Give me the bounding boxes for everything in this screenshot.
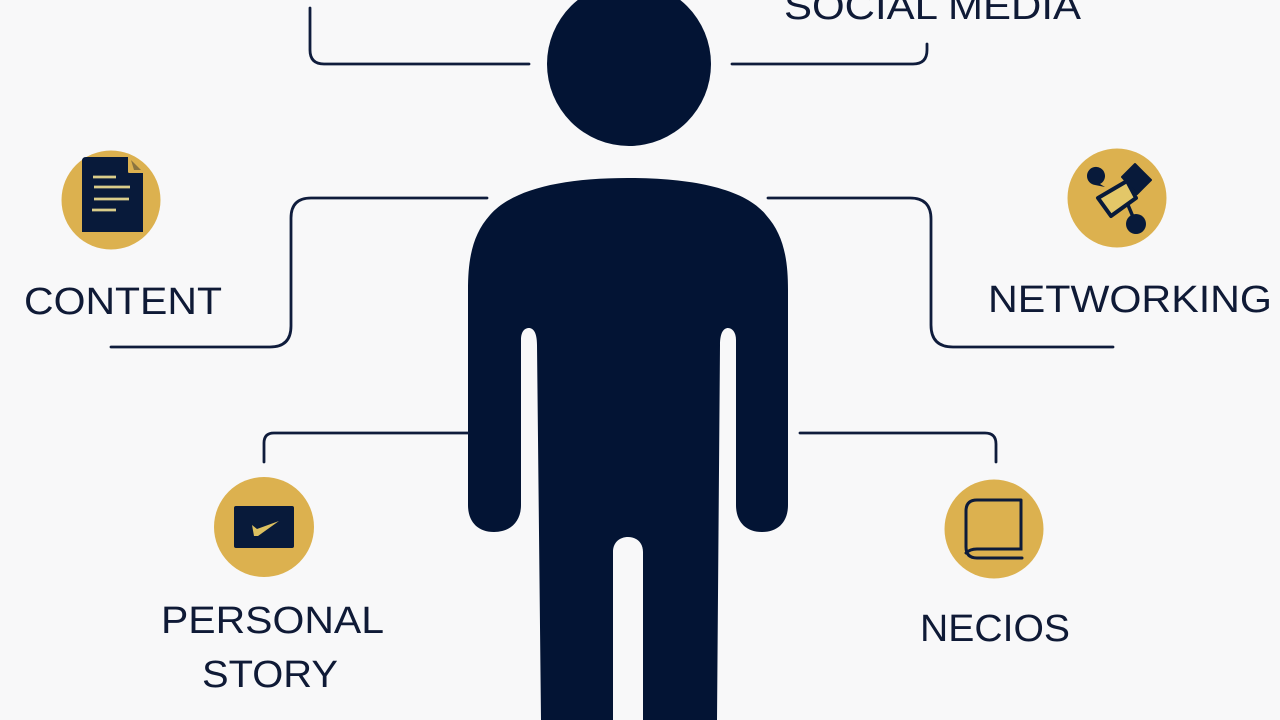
connector: content (111, 198, 487, 347)
label: networking: NETWORKING (988, 279, 1272, 321)
panel: book topic (920, 480, 1070, 650)
connector: personal story (264, 433, 468, 462)
icon: document (62, 150, 160, 250)
label: content: CONTENT (24, 281, 222, 323)
icon: check card (214, 477, 314, 577)
label: personal story: PERSONAL (161, 600, 384, 642)
panel: networking (988, 148, 1272, 321)
connector lines (111, 8, 1113, 462)
figure head (547, 0, 711, 146)
connector: lower right (800, 433, 996, 462)
central human figure (468, 0, 788, 720)
figure body (468, 178, 788, 720)
connector: top left (310, 8, 529, 64)
icon: network device (1068, 148, 1166, 248)
label: personal story (161, 600, 384, 696)
icon: book (944, 480, 1044, 578)
label: personal story: STORY (202, 654, 338, 696)
label: garbled topic text: NECIOS (920, 608, 1070, 650)
connector: social media (732, 44, 927, 64)
connector: networking (768, 198, 1113, 347)
panel: content (24, 150, 222, 323)
panel: personal story (161, 477, 384, 696)
